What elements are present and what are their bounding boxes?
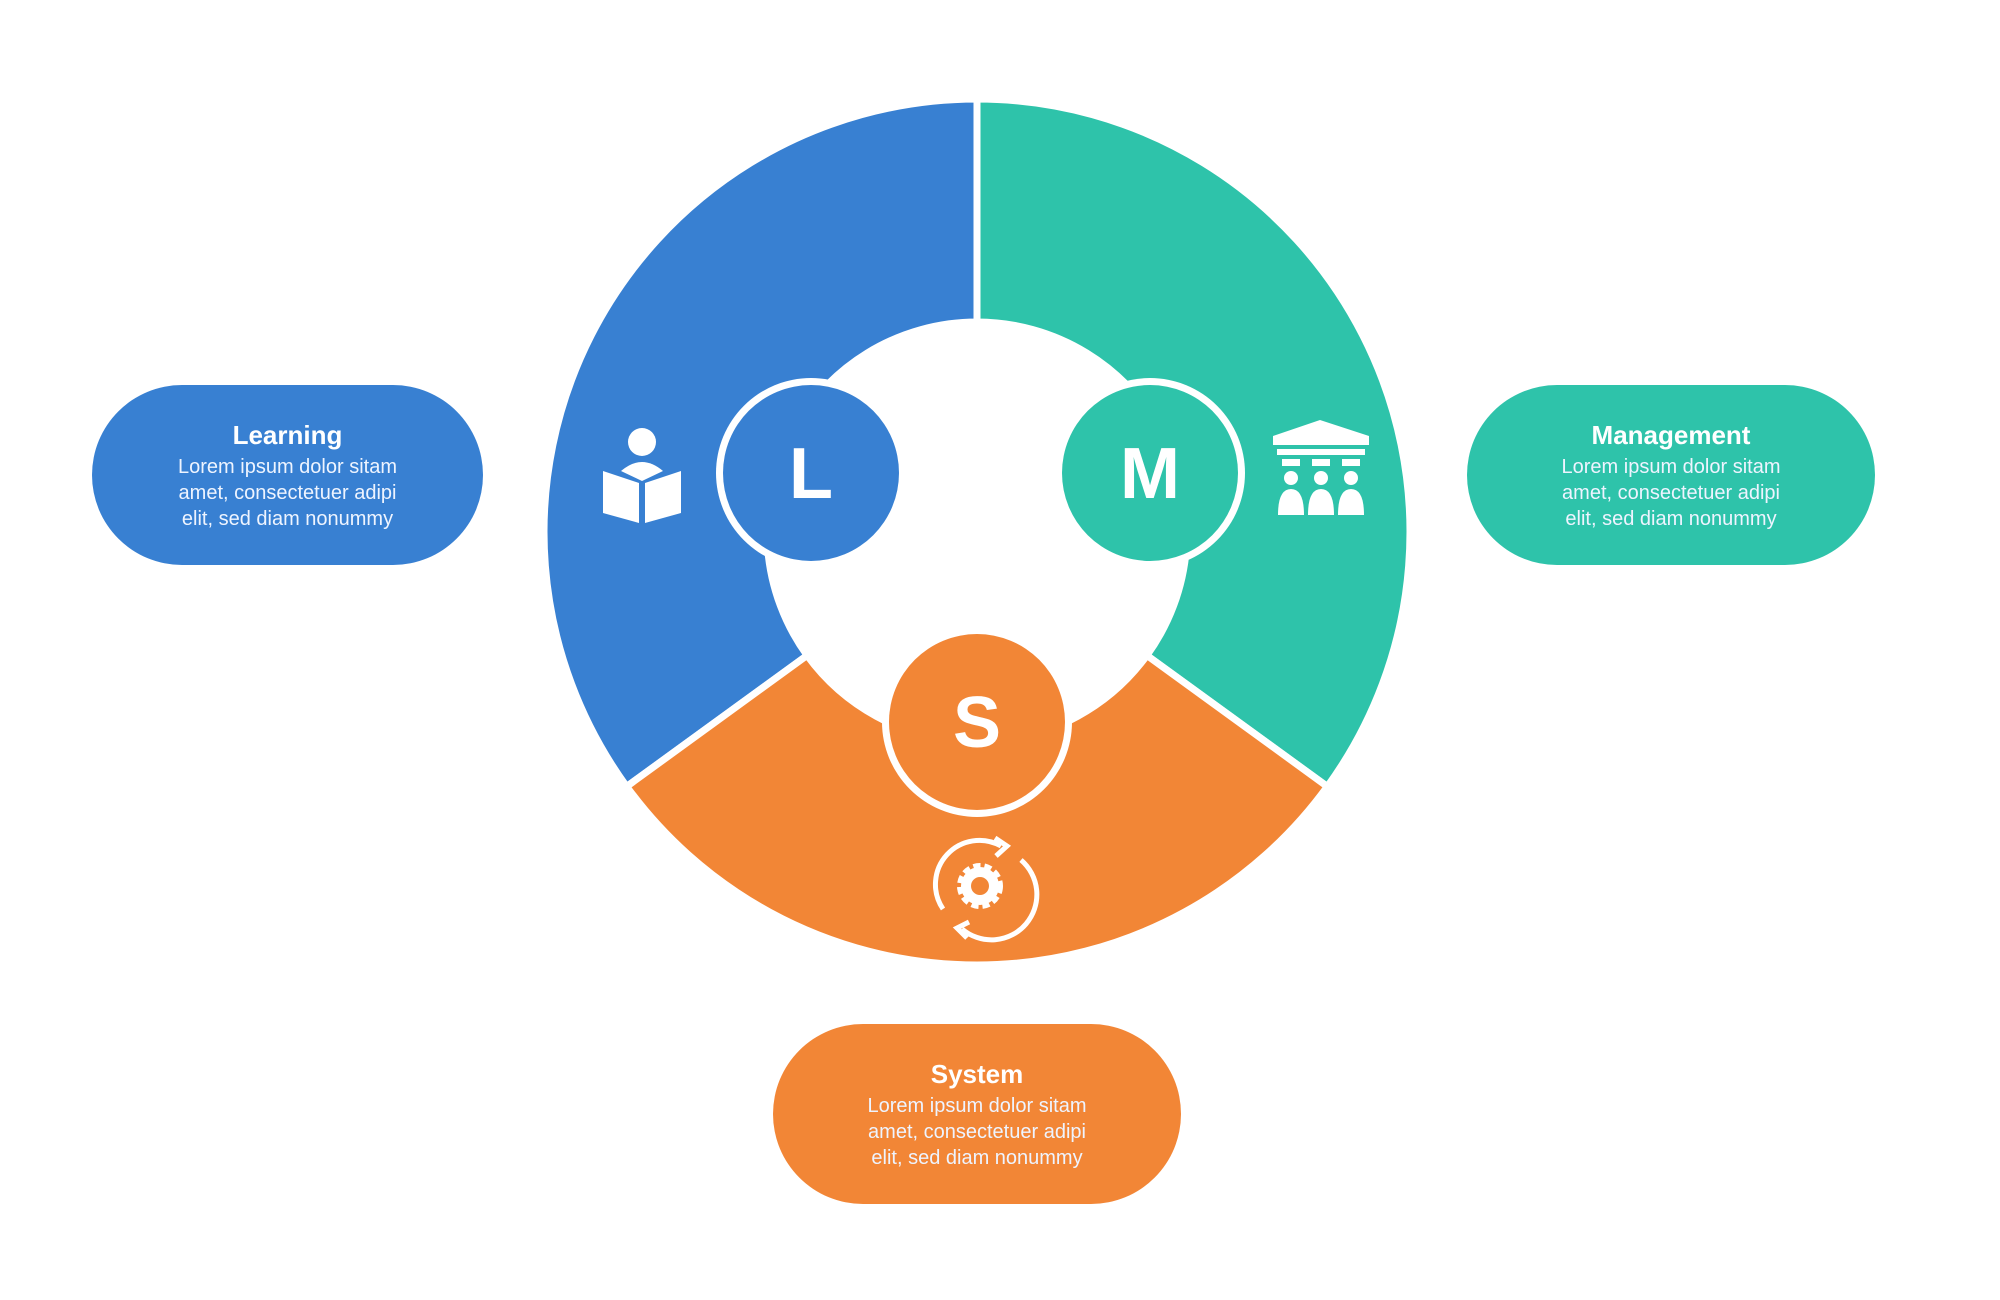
segment: management (teal) xyxy=(977,99,1410,786)
circle: L xyxy=(716,378,906,568)
pill: Learning: amet, consectetuer adipi xyxy=(179,482,396,504)
pill: System: amet, consectetuer adipi xyxy=(868,1121,1086,1143)
segment: learning (blue) xyxy=(544,99,977,786)
pill: Learning xyxy=(92,385,483,565)
icon: gear cycle xyxy=(935,838,1037,940)
icon: reader with book xyxy=(603,428,681,523)
pill: Management: amet, consectetuer adipi xyxy=(1562,482,1780,504)
circle: M xyxy=(1055,378,1245,568)
icon: institution with people xyxy=(1273,420,1369,515)
pill: Learning: Learning xyxy=(233,420,342,450)
pill: Learning: Lorem ipsum dolor sitam xyxy=(178,456,397,478)
pill: Management: Lorem ipsum dolor sitam xyxy=(1562,456,1780,478)
circle: M: M xyxy=(1120,434,1180,514)
pill: System: System xyxy=(931,1059,1023,1089)
circle: L: L xyxy=(789,434,833,514)
pill: System: elit, sed diam nonummy xyxy=(871,1147,1083,1169)
pill: Learning: elit, sed diam nonummy xyxy=(182,508,393,530)
pill: System xyxy=(773,1024,1181,1204)
circle: S xyxy=(882,627,1072,817)
pill: Management: Management xyxy=(1592,420,1750,450)
segment: system (orange) xyxy=(627,655,1327,965)
pill: Management: elit, sed diam nonummy xyxy=(1565,508,1777,530)
pill: Management xyxy=(1467,385,1875,565)
pill: System: Lorem ipsum dolor sitam xyxy=(868,1095,1086,1117)
circle: S: S xyxy=(953,683,1001,763)
